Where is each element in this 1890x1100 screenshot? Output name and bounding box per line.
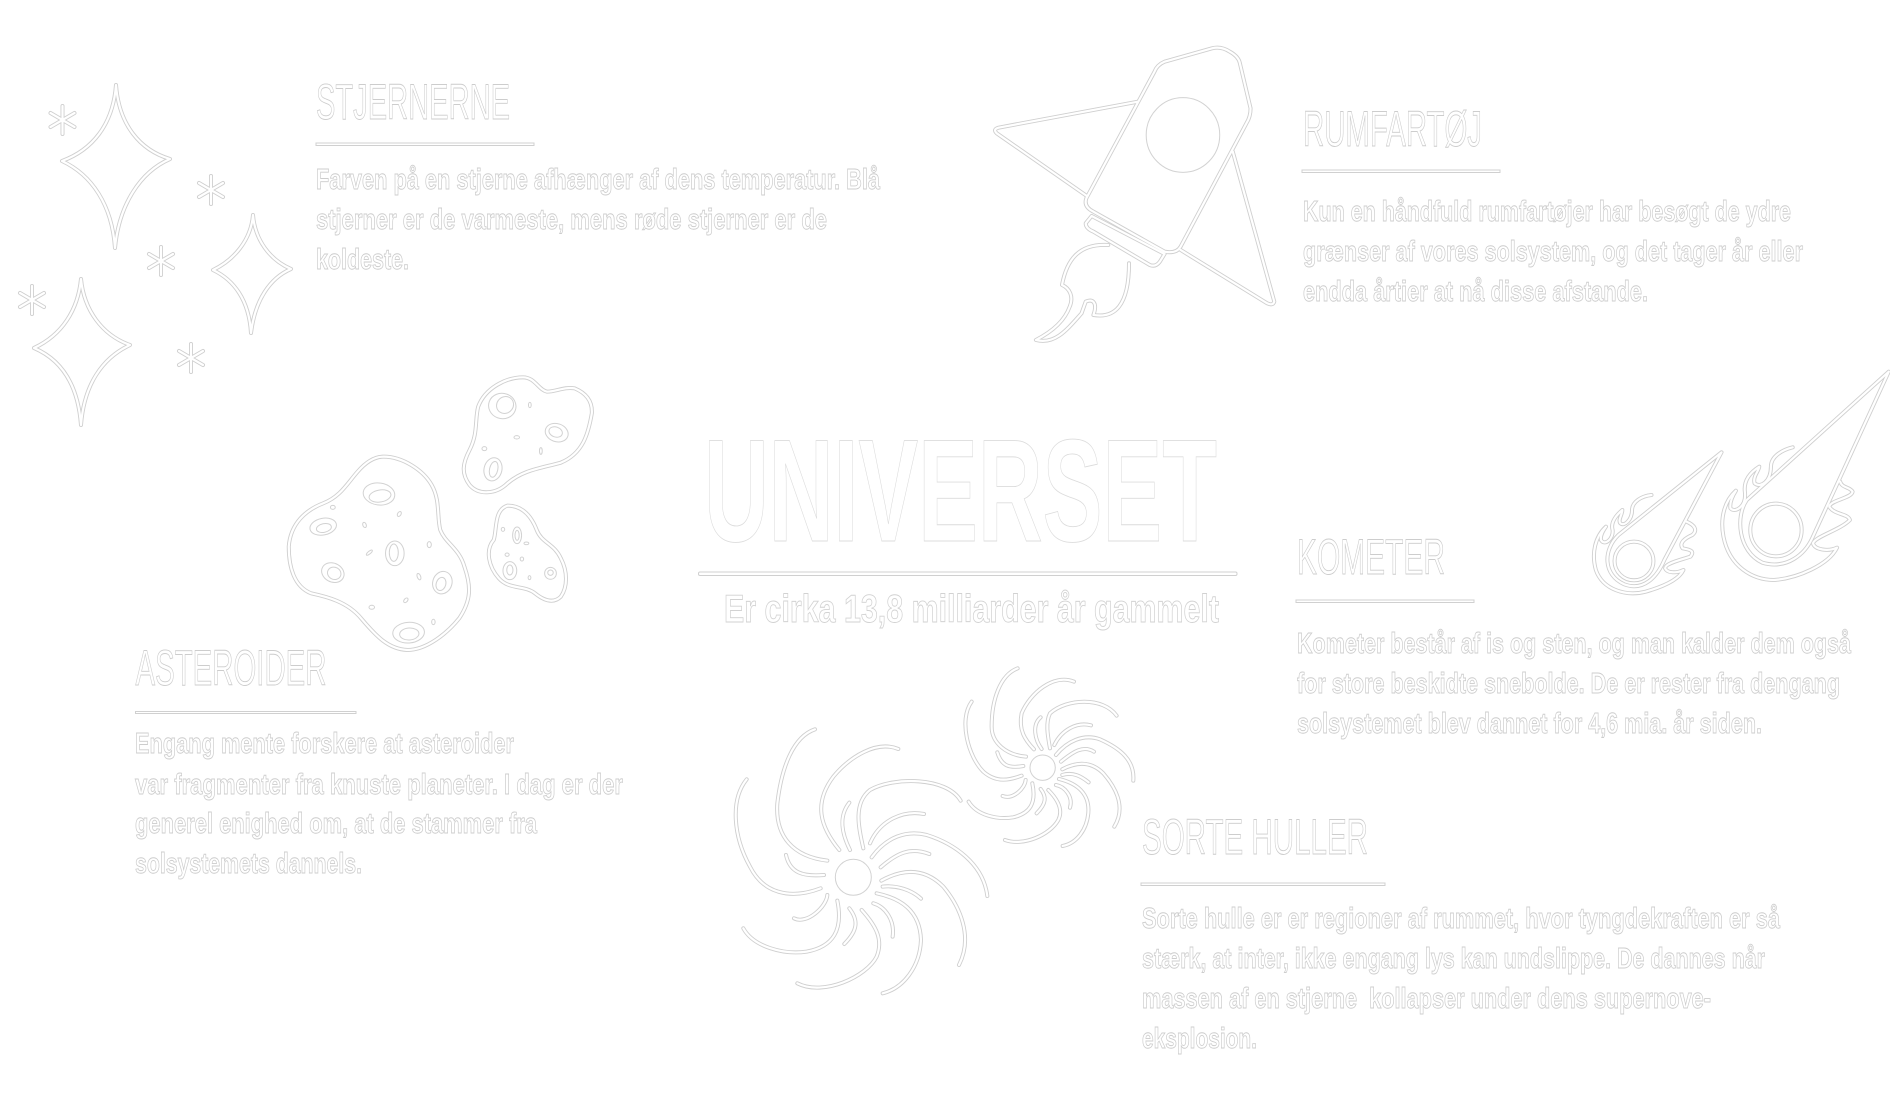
body text: solsystemets dannels. [135, 848, 362, 880]
rule [1302, 170, 1500, 172]
icon: asteroids [289, 377, 592, 650]
panel: rumfartoj [995, 48, 1803, 341]
body text [1142, 903, 1781, 1055]
body text [1297, 628, 1852, 740]
body text: endda årtier at nå disse afstande. [1303, 276, 1648, 308]
body text: Engang mente forskere at asteroider [135, 728, 514, 760]
icon: rocket [995, 48, 1274, 341]
panel: stjernerne [20, 74, 881, 425]
heading: ASTEROIDER [136, 640, 326, 696]
heading: KOMETER [1297, 529, 1445, 585]
rule [1141, 883, 1385, 886]
body text [135, 728, 623, 880]
title: UNIVERSET [704, 409, 1217, 572]
heading: STJERNERNE [316, 74, 510, 130]
body text: eksplosion. [1142, 1023, 1257, 1055]
body text [1303, 196, 1803, 308]
icon: comets [1594, 372, 1889, 593]
panel: kometer [1296, 372, 1889, 740]
body text: generel enighed om, at de stammer fra [135, 808, 538, 840]
body text: massen af en stjerne kollapser under dens supernove- [1142, 983, 1711, 1015]
rule [316, 143, 534, 146]
subtitle: Er cirka 13,8 milliarder år gammelt [724, 588, 1219, 631]
body text [316, 164, 881, 276]
panel: asteroider [135, 377, 623, 880]
panel: sorte huller [736, 668, 1781, 1055]
title rule [698, 572, 1237, 576]
body text: stjerner er de varmeste, mens røde stjerner er de [316, 204, 827, 236]
body text: Farven på en stjerne afhænger af dens temperatur. Blå [316, 164, 881, 196]
panel: center title [698, 409, 1237, 631]
icon: stars [20, 85, 291, 425]
heading: SORTE HULLER [1142, 809, 1368, 865]
body text: var fragmenter fra knuste planeter. I dag er der [135, 769, 623, 801]
rule [1296, 600, 1474, 602]
body text: koldeste. [316, 244, 409, 276]
heading: RUMFARTØJ [1303, 101, 1482, 157]
icon: black holes [736, 668, 1133, 993]
rule [136, 712, 356, 714]
